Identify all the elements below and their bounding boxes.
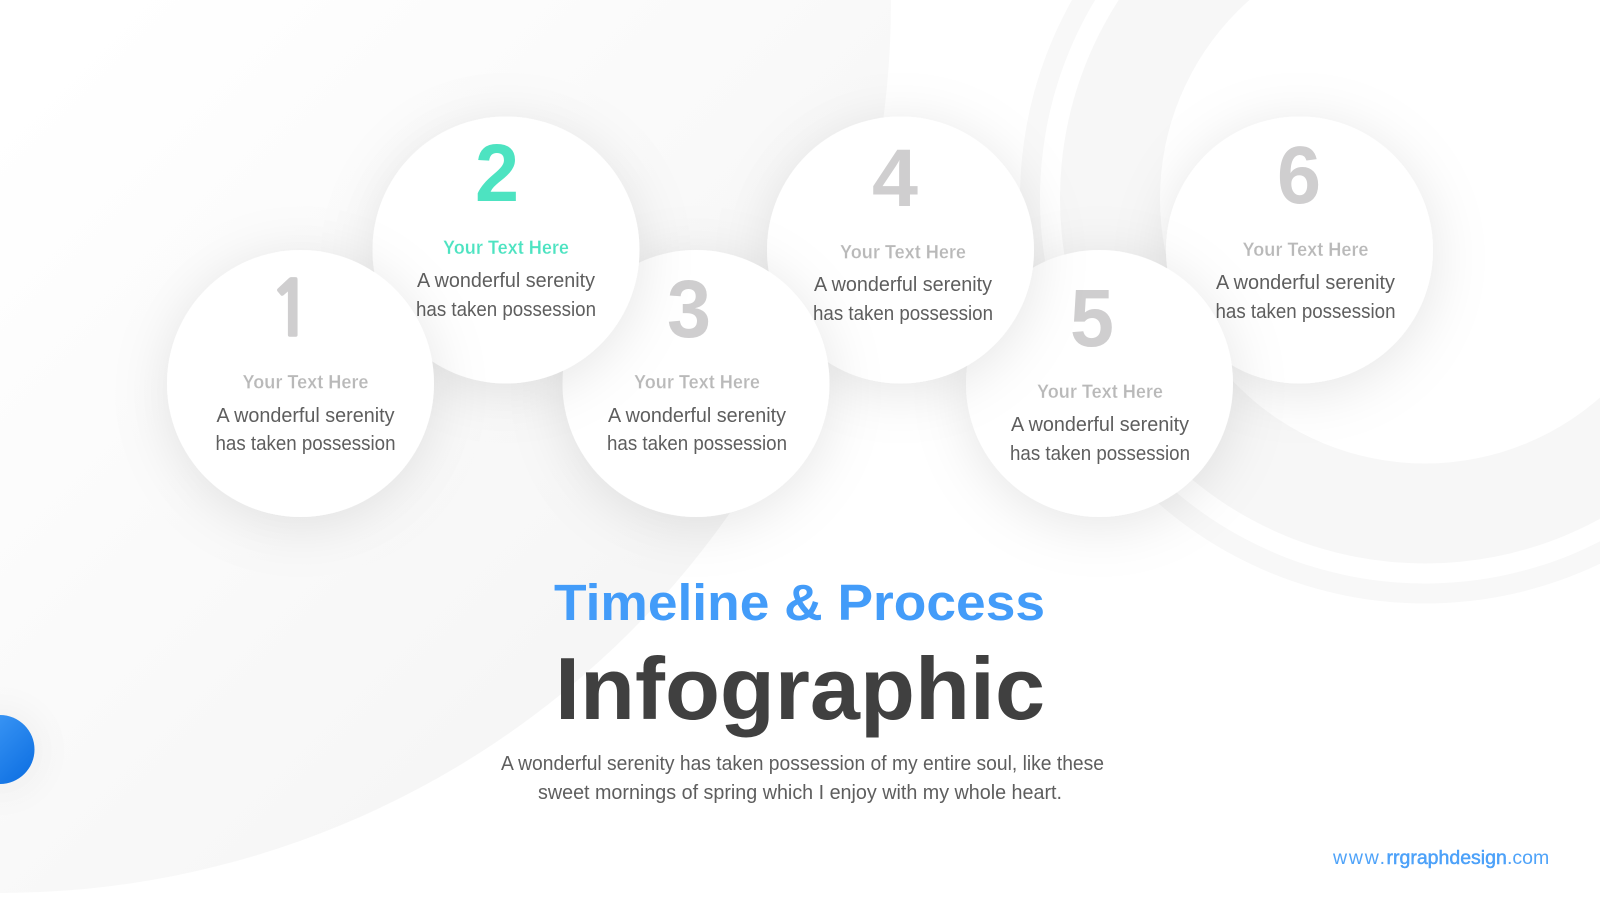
step 6: [1166, 116, 1433, 384]
background: large quarter circle: [0, 0, 891, 893]
website url: .com: [1507, 847, 1549, 869]
step 1: A wonderful serenity: [216, 405, 394, 427]
step 1: has taken possession: [216, 433, 396, 455]
description text: [501, 753, 1104, 804]
step 6: 6: [1277, 130, 1321, 221]
heading: Timeline & Process: Timeline & Process: [554, 574, 1045, 631]
description text: sweet mornings of spring which I enjoy with my whole heart.: [538, 782, 1062, 804]
step 6: A wonderful serenity: [1216, 272, 1395, 294]
step 2 (highlighted): [372, 116, 640, 384]
step 2 (highlighted): has taken possession: [416, 299, 596, 321]
step 4: A wonderful serenity: [814, 274, 992, 296]
step 2 (highlighted): Your Text Here: [443, 238, 569, 259]
step 4: [767, 116, 1034, 384]
step 2 (highlighted): 2: [475, 128, 519, 219]
step 5: 5: [1070, 273, 1114, 364]
step 2 (highlighted): A wonderful serenity: [417, 270, 595, 292]
step 1: [167, 250, 434, 517]
step 4: has taken possession: [813, 303, 993, 325]
step 5: has taken possession: [1010, 443, 1190, 465]
step 5: A wonderful serenity: [1011, 414, 1189, 436]
step 3: A wonderful serenity: [608, 405, 786, 427]
step 6: has taken possession: [1216, 301, 1396, 323]
step 4: 4: [872, 133, 918, 224]
background: concentric rings: [1020, 0, 1600, 604]
website url: rrgraphdesign: [1386, 847, 1507, 869]
step 5: [966, 250, 1233, 517]
icon: blue half circle: [0, 707, 44, 795]
step 3: Your Text Here: [634, 372, 760, 394]
step 3: has taken possession: [607, 433, 787, 455]
step 3: [562, 250, 830, 517]
step 5: Your Text Here: [1037, 382, 1163, 403]
step 1: Your Text Here: [242, 372, 368, 394]
website url: www.: [1332, 847, 1387, 869]
description text: A wonderful serenity has taken possession of my entire soul, like these: [501, 753, 1104, 775]
step 3: 3: [667, 264, 711, 355]
heading: Infographic: Infographic: [555, 639, 1045, 738]
step 4: Your Text Here: [840, 242, 966, 264]
step 6: Your Text Here: [1242, 240, 1368, 261]
step 1: 1: [268, 273, 314, 348]
